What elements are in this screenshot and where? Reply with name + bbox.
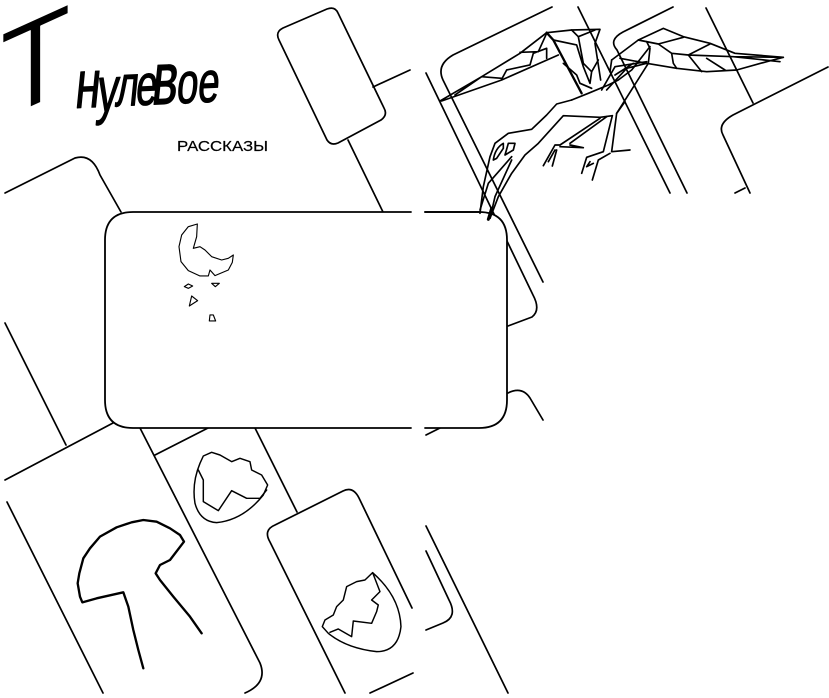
frame: lower left card xyxy=(5,423,262,693)
frame: lower right fragments xyxy=(426,428,508,693)
right wing xyxy=(602,28,783,113)
frame: upper right lines xyxy=(441,7,552,282)
subtitle: РАССКАЗЫ xyxy=(177,139,268,155)
illustration: broken shell with shards xyxy=(179,224,233,321)
left wing xyxy=(440,29,601,101)
illustration: mushroom xyxy=(78,520,202,668)
shards xyxy=(184,283,219,321)
body, head and legs xyxy=(480,47,650,219)
frame: top small card xyxy=(278,8,385,144)
illustration: eggshell lower xyxy=(322,573,401,652)
frame: lower middle card xyxy=(267,490,413,693)
illustration: flying bird xyxy=(440,28,783,219)
line segment beside the bird xyxy=(425,211,480,213)
illustration: eggshell upper xyxy=(194,452,268,523)
title: word: н xyxy=(72,47,105,123)
title: word: ое xyxy=(174,50,223,116)
title: word: ле xyxy=(114,53,161,119)
shell xyxy=(179,224,233,276)
title: word: в xyxy=(149,37,183,121)
frame: upper left card xyxy=(5,157,121,212)
title: word: у xyxy=(95,53,123,126)
central white panel xyxy=(105,212,507,428)
